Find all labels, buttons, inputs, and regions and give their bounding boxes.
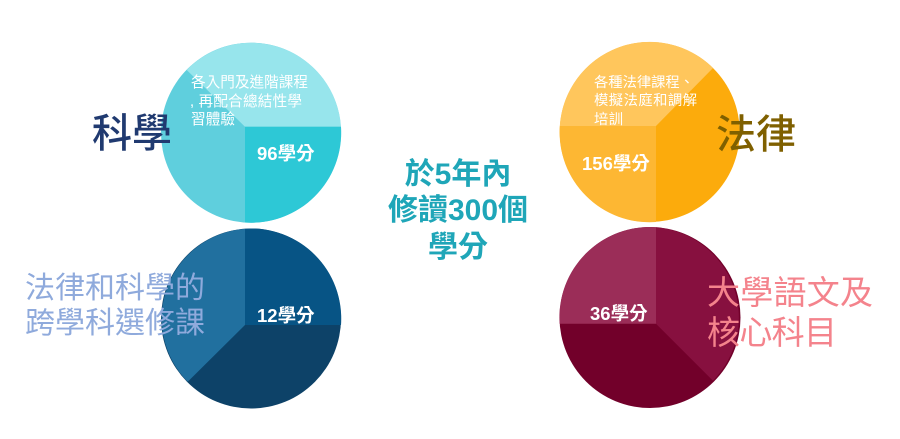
- heading: university language and core: 核心科目: [707, 314, 837, 351]
- slice: science base: [161, 43, 341, 223]
- slice: interdisciplinary top right: [245, 228, 341, 325]
- heading: centre total: [388, 158, 528, 264]
- heading: centre total: 學分: [428, 231, 488, 264]
- panel: university core pie: [559, 227, 740, 408]
- text: law courses: 模擬法庭和調解: [594, 92, 697, 109]
- text: law courses: 培訓: [594, 111, 623, 128]
- slice: science top: [187, 43, 341, 127]
- heading: interdisciplinary electives: [25, 272, 205, 340]
- panel: science pie: [161, 43, 341, 223]
- slice: core right: [656, 227, 739, 381]
- slice: interdisciplinary base: [161, 228, 341, 408]
- heading: interdisciplinary electives: 法律和科學的: [25, 272, 205, 305]
- heading: interdisciplinary electives: 跨學科選修課: [25, 307, 205, 340]
- slice: law lower left: [560, 126, 656, 222]
- slice: core upper left: [559, 227, 656, 324]
- text: elective credits: 12學分: [257, 305, 315, 326]
- slice: science bottom right: [245, 127, 341, 223]
- heading: centre total: 於5年內: [405, 158, 511, 191]
- text: science courses: , 再配合總結性學: [190, 92, 302, 110]
- panel: law pie: [560, 42, 740, 222]
- text: law courses: [594, 74, 697, 128]
- slice: law top: [560, 42, 713, 126]
- heading: university language and core: [707, 274, 873, 351]
- text: law courses: 各種法律課程、: [594, 74, 694, 91]
- text: science courses: 習體驗: [191, 111, 235, 128]
- slice: interdisciplinary left: [162, 229, 245, 382]
- text: law credits: 156學分: [582, 153, 650, 174]
- text: core credits: 36學分: [590, 303, 648, 324]
- heading: university language and core: 大學語文及: [707, 274, 873, 311]
- text: science courses: [190, 74, 308, 128]
- heading: law: 法律: [716, 113, 796, 157]
- slice: law base: [560, 42, 740, 222]
- panel: interdisciplinary pie: [161, 228, 341, 408]
- text: science courses: 各入門及進階課程: [191, 74, 308, 91]
- slice: core base: [560, 227, 740, 408]
- heading: science: 科學: [92, 112, 172, 156]
- heading: centre total: 修讀300個: [388, 194, 528, 227]
- text: science credits: 96學分: [257, 143, 315, 164]
